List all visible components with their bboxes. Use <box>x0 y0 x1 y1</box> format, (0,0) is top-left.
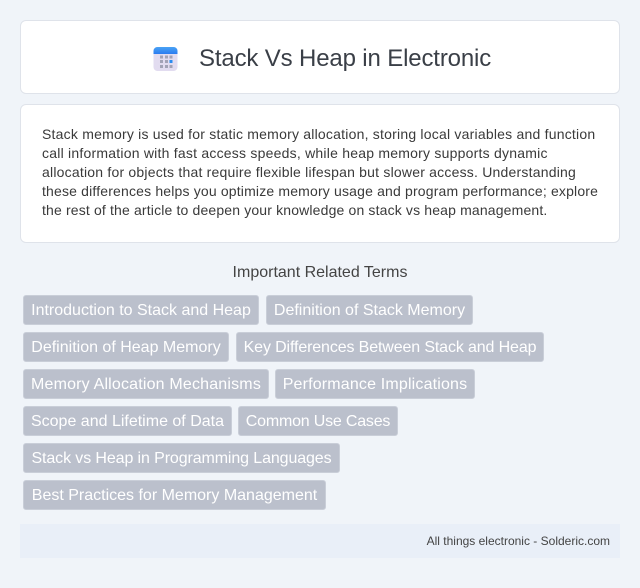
tag: Definition of Heap Memory <box>31 339 221 356</box>
summary text: these differences helps you optimize memory usage and program performance; explore <box>42 183 598 199</box>
summary text: Stack memory is used for static memory allocation, storing local variables and function <box>42 126 595 142</box>
tag <box>238 406 398 436</box>
summary text: allocation for objects that require flexible lifespan but slower access. Understanding <box>42 164 576 180</box>
tag: Memory Allocation Mechanisms <box>31 376 261 393</box>
summary text: the rest of the article to deepen your knowledge on stack vs heap management. <box>42 202 547 218</box>
tag: Key Differences Between Stack and Heap <box>244 339 536 356</box>
tags <box>23 295 544 510</box>
tag <box>23 480 326 510</box>
summary text: call information with fast access speeds, while heap memory supports dynamic <box>42 145 548 161</box>
section heading: Important Related Terms <box>233 264 407 281</box>
tag <box>23 443 340 473</box>
footer text: All things electronic - Solderic.com <box>427 534 610 548</box>
footer <box>20 524 620 558</box>
tag: Common Use Cases <box>246 413 390 430</box>
tag <box>23 295 259 325</box>
tag <box>23 332 229 362</box>
title card <box>20 20 620 94</box>
tag: Introduction to Stack and Heap <box>31 302 251 319</box>
summary text <box>42 126 598 218</box>
icon: calendar <box>154 47 178 71</box>
title: Stack Vs Heap in Electronic <box>199 45 491 72</box>
tag <box>236 332 544 362</box>
tag <box>266 295 473 325</box>
tag: Performance Implications <box>283 376 467 393</box>
summary panel <box>20 104 620 243</box>
tag: Scope and Lifetime of Data <box>31 413 224 430</box>
tag <box>23 406 232 436</box>
tag <box>23 369 269 399</box>
tag <box>275 369 475 399</box>
tag: Definition of Stack Memory <box>274 302 465 319</box>
tag: Best Practices for Memory Management <box>32 487 317 504</box>
tag: Stack vs Heap in Programming Languages <box>32 450 332 467</box>
